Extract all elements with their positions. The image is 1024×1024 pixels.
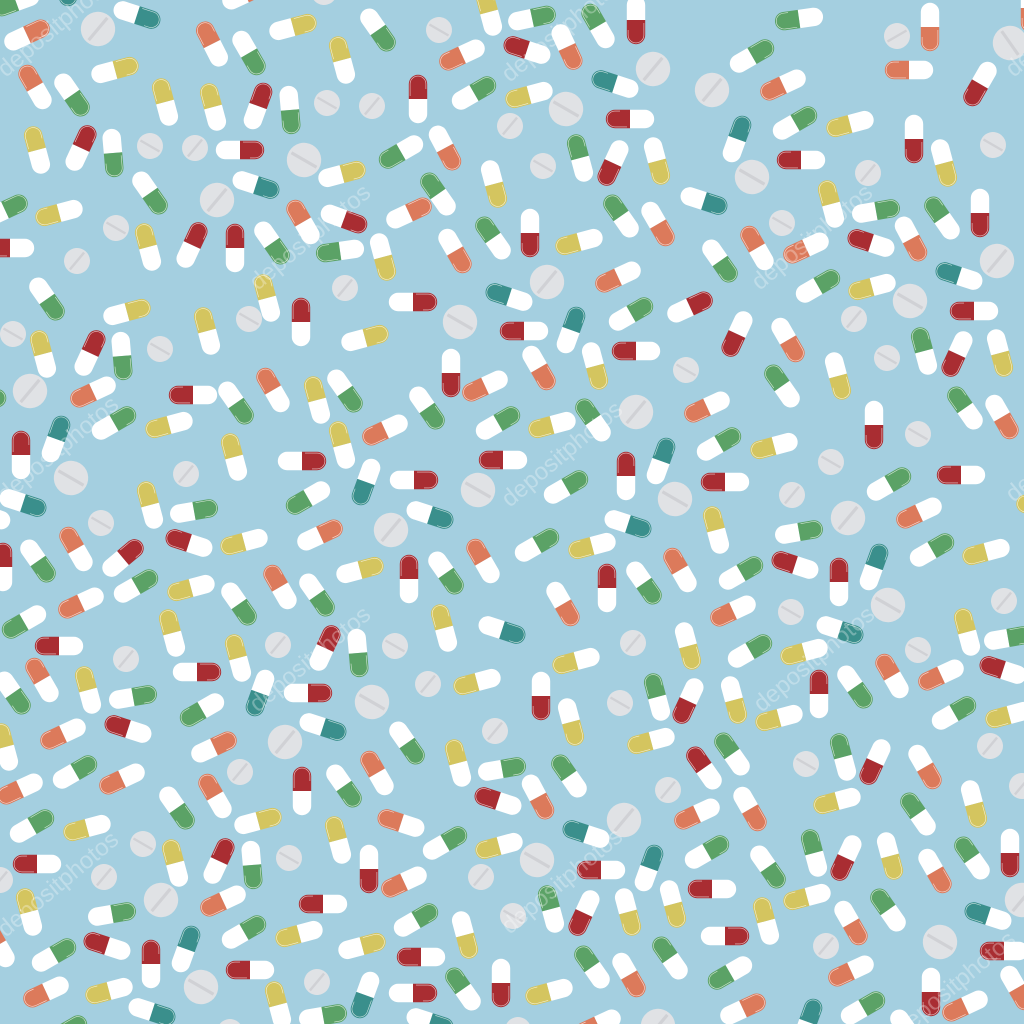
watermark text: depositphotos	[244, 179, 376, 296]
watermark text: depositphotos	[746, 179, 878, 296]
watermark text: depositphotos	[748, 601, 880, 718]
watermark text: depositphotos	[244, 601, 376, 718]
watermark text: depositphotos	[496, 396, 628, 513]
watermark text: depositphotos	[496, 823, 628, 940]
